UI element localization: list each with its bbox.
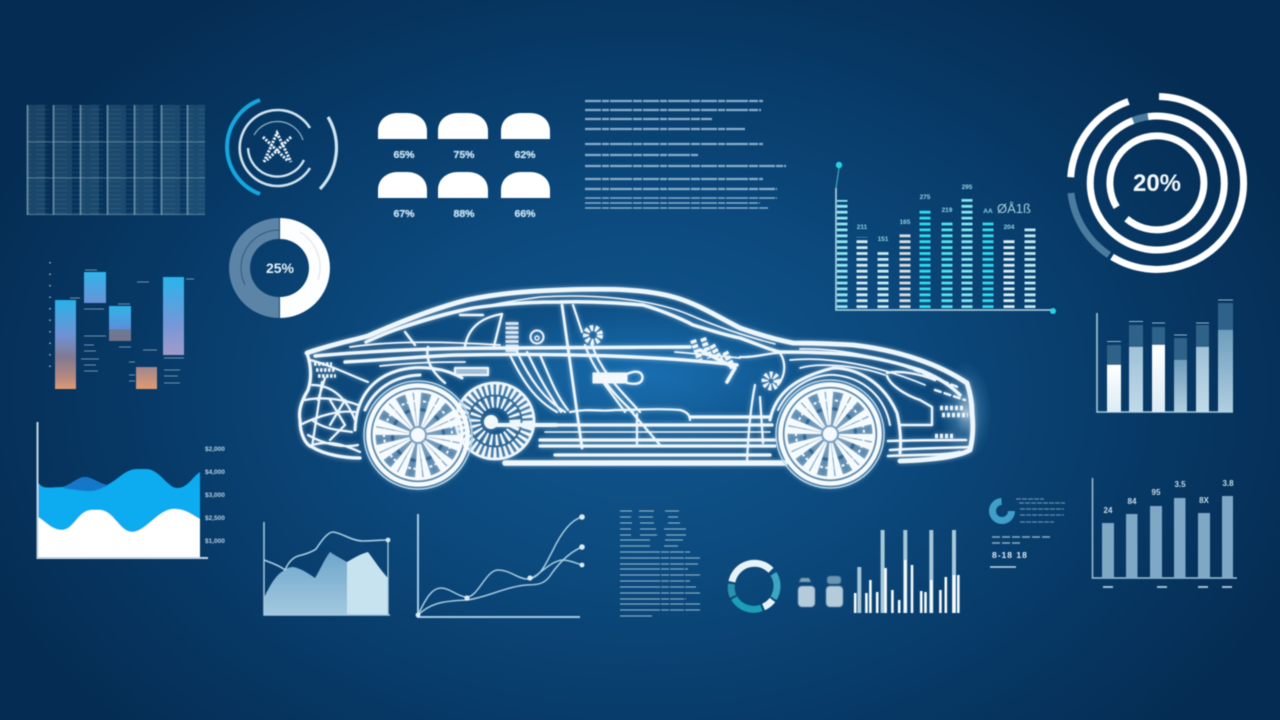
bar chart: spike histogram (855, 530, 958, 613)
dome labels: 62% (514, 149, 536, 161)
line chart: three rising lines (416, 514, 585, 617)
text block: bottom centre columns (620, 511, 700, 616)
donut value: 25% (266, 260, 295, 276)
rear arch and pillar (355, 368, 462, 430)
equaliser labels: 219 (942, 207, 953, 214)
donut chart: small segmented ring (731, 563, 777, 609)
legend: mini donut with notes (990, 499, 1065, 567)
sill bands (540, 417, 775, 455)
wave chart scale labels: $3,000 (205, 492, 225, 499)
ring value: 20% (1133, 170, 1181, 197)
far rear wheel (456, 383, 534, 459)
equaliser labels: 211 (857, 224, 868, 231)
bar chart: segmented equaliser (836, 162, 1056, 314)
wave chart scale labels (205, 446, 225, 545)
dome labels: 65% (393, 149, 415, 161)
donut chart: 25 percent (229, 218, 330, 318)
equaliser columns (842, 197, 1030, 308)
tail (299, 353, 360, 458)
monochrome bar labels: 95 (1152, 488, 1161, 497)
front arch (770, 368, 901, 453)
wave chart scale labels: $2,000 (205, 446, 225, 453)
icon: concentric dial (227, 100, 336, 194)
equaliser labels: 275 (920, 194, 931, 201)
donut chart: 20 percent concentric rings (1071, 96, 1244, 269)
roof and hood outline (307, 289, 973, 461)
text block: top centre paragraph (585, 101, 786, 208)
monochrome bar labels: 3.8 (1222, 479, 1234, 488)
equaliser labels: 165 (900, 219, 911, 226)
monochrome bar labels: 24 (1104, 506, 1113, 515)
dome row one (378, 113, 550, 139)
panel: percentage domes (378, 113, 550, 220)
icon: wireframe car (299, 289, 992, 489)
panel: data grid table (27, 105, 205, 215)
wave chart scale labels: $4,000 (205, 469, 225, 476)
monochrome bar labels: 8X (1199, 496, 1210, 505)
dome labels: 66% (514, 208, 536, 220)
bar chart: stacked gradient bars (1097, 300, 1233, 412)
legend figures: 8-18 18 (992, 550, 1028, 560)
equaliser labels: 204 (1004, 224, 1015, 231)
icon: small gauge pair (798, 576, 843, 607)
front end (887, 372, 935, 425)
waterfall annotations (70, 270, 194, 383)
monochrome bar labels (1104, 479, 1234, 515)
equaliser axes (836, 162, 1056, 314)
monochrome bar labels: 3.5 (1174, 480, 1186, 489)
bar chart: monochrome bars (1092, 478, 1237, 587)
equaliser labels: 295 (962, 184, 973, 191)
dome labels (393, 149, 536, 220)
equaliser labels: ØÅ1ß (997, 201, 1031, 216)
dome row two (378, 172, 550, 198)
equaliser labels: 151 (878, 236, 889, 243)
cabin light (460, 303, 840, 447)
car body wireframe (299, 289, 973, 463)
seats and pillars (506, 322, 518, 352)
bar chart: floating gradient waterfall (50, 262, 194, 389)
dome labels: 75% (453, 149, 475, 161)
rear wheel (364, 381, 472, 489)
wave chart scale labels: $2,500 (205, 515, 225, 522)
front wheel (776, 380, 884, 488)
equaliser labels (857, 184, 1031, 243)
monochrome bar labels: 84 (1128, 497, 1137, 506)
mirror and A pillar (693, 338, 733, 368)
equaliser labels: AA (983, 208, 993, 215)
headlight glow (940, 362, 992, 462)
area chart: two tone with line (264, 522, 390, 615)
area chart: layered waves (38, 422, 225, 558)
dome labels: 67% (393, 208, 415, 220)
dome labels: 88% (453, 208, 475, 220)
wave chart scale labels: $1,000 (205, 538, 225, 545)
